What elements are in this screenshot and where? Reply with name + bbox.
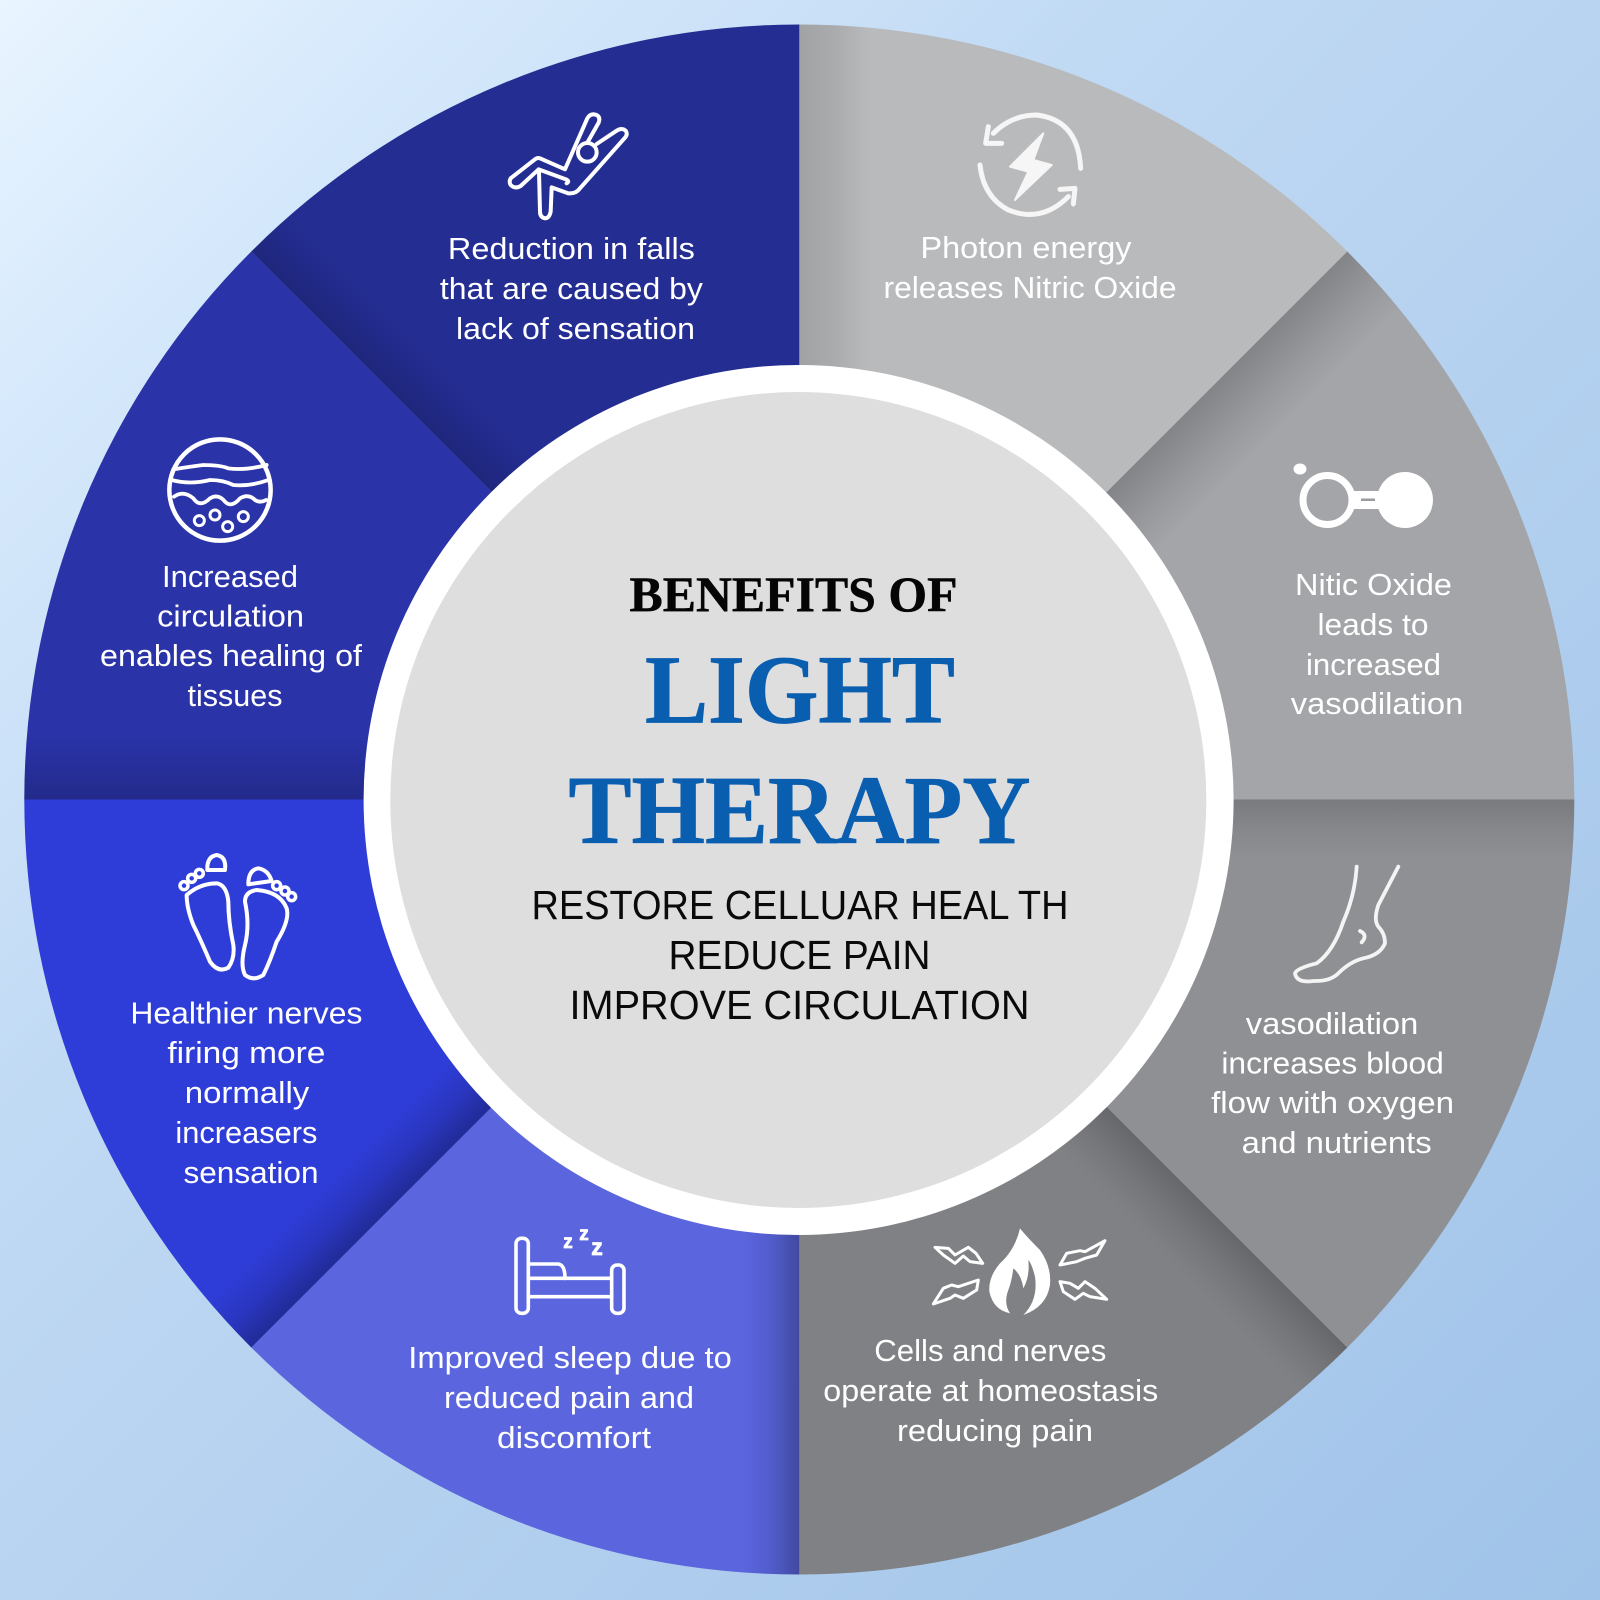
text: vasodilation: flow with oxygen [1211, 1085, 1454, 1120]
icon: bed with zzz: z [591, 1234, 603, 1260]
text: vasodilation: and nutrients [1242, 1125, 1432, 1160]
icon: bed with zzz: z [579, 1224, 589, 1245]
heading: therapy: THERAPY [568, 757, 1030, 864]
text: reduction in falls: Reduction in falls [448, 231, 695, 266]
segment: vasodilation [799, 800, 1574, 1348]
text: improved sleep: Improved sleep due to [408, 1340, 732, 1375]
icon: bed with zzz [516, 1224, 624, 1313]
text: increased circulation: enables healing of [100, 638, 362, 673]
text: homeostasis: Cells and nerves [874, 1333, 1106, 1368]
text: healthier nerves [130, 996, 362, 1190]
icon: bed with zzz: z [563, 1232, 573, 1253]
text: homeostasis: operate at homeostasis [823, 1373, 1158, 1408]
icon: falling person [510, 114, 627, 218]
icon: energy cycle with bolt [980, 115, 1081, 214]
text: nitric oxide: Nitic Oxide [1295, 567, 1452, 602]
text: increased circulation: Increased [162, 559, 298, 594]
segment: healthier nerves [24, 800, 799, 1348]
text: nitric oxide: vasodilation [1291, 686, 1463, 721]
text: healthier nerves: Healthier nerves [130, 996, 362, 1030]
centre summary lines: IMPROVE CIRCULATION [570, 982, 1030, 1028]
heading: benefits of: BENEFITS OF [630, 566, 958, 622]
segment: reduction in falls [251, 24, 799, 800]
text: improved sleep [408, 1340, 732, 1455]
text: healthier nerves: increasers [175, 1115, 317, 1150]
text: reduction in falls: that are caused by [440, 271, 703, 306]
text: nitric oxide: leads to [1318, 607, 1428, 642]
segment: photon energy [799, 24, 1347, 800]
icon: skin layers [169, 439, 271, 541]
text: reduction in falls [440, 231, 703, 346]
text: increased circulation: circulation [157, 598, 304, 634]
segment: improved sleep [251, 800, 799, 1574]
text: photon energy [884, 230, 1176, 305]
text: healthier nerves: sensation [184, 1155, 318, 1190]
text: vasodilation: increases blood [1221, 1046, 1444, 1080]
text: nitric oxide: increased [1306, 647, 1441, 682]
text: nitric oxide [1291, 567, 1463, 721]
text: vasodilation [1211, 1006, 1454, 1160]
text: photon energy: Photon energy [920, 230, 1132, 265]
centre summary lines: REDUCE PAIN [668, 932, 930, 978]
icon: flame with nerve bolts [933, 1228, 1107, 1315]
icon: foot and leg [1295, 867, 1398, 981]
heading: light: LIGHT [645, 636, 955, 744]
centre summary lines: RESTORE CELLUAR HEAL TH [532, 882, 1068, 928]
centre title [568, 566, 1030, 864]
text: improved sleep: discomfort [497, 1420, 651, 1455]
segment: nitric oxide [799, 252, 1574, 800]
text: homeostasis: reducing pain [897, 1413, 1093, 1448]
icon: nitric oxide molecule [1294, 464, 1433, 528]
text: improved sleep: reduced pain and [444, 1380, 694, 1415]
text: healthier nerves: normally [185, 1075, 310, 1110]
text: photon energy: releases Nitric Oxide [884, 270, 1176, 305]
centre disc [390, 392, 1206, 1208]
text: increased circulation: tissues [188, 678, 282, 713]
text: homeostasis [823, 1333, 1158, 1448]
segment: homeostasis [799, 800, 1347, 1574]
text: increased circulation [100, 559, 362, 713]
text: vasodilation: vasodilation [1246, 1006, 1418, 1041]
centre summary lines [532, 882, 1068, 1028]
segment: increased circulation [24, 252, 799, 800]
text: healthier nerves: firing more [167, 1035, 325, 1070]
text: reduction in falls: lack of sensation [456, 311, 695, 346]
icon: bare feet [180, 855, 296, 978]
white ring [364, 365, 1234, 1235]
